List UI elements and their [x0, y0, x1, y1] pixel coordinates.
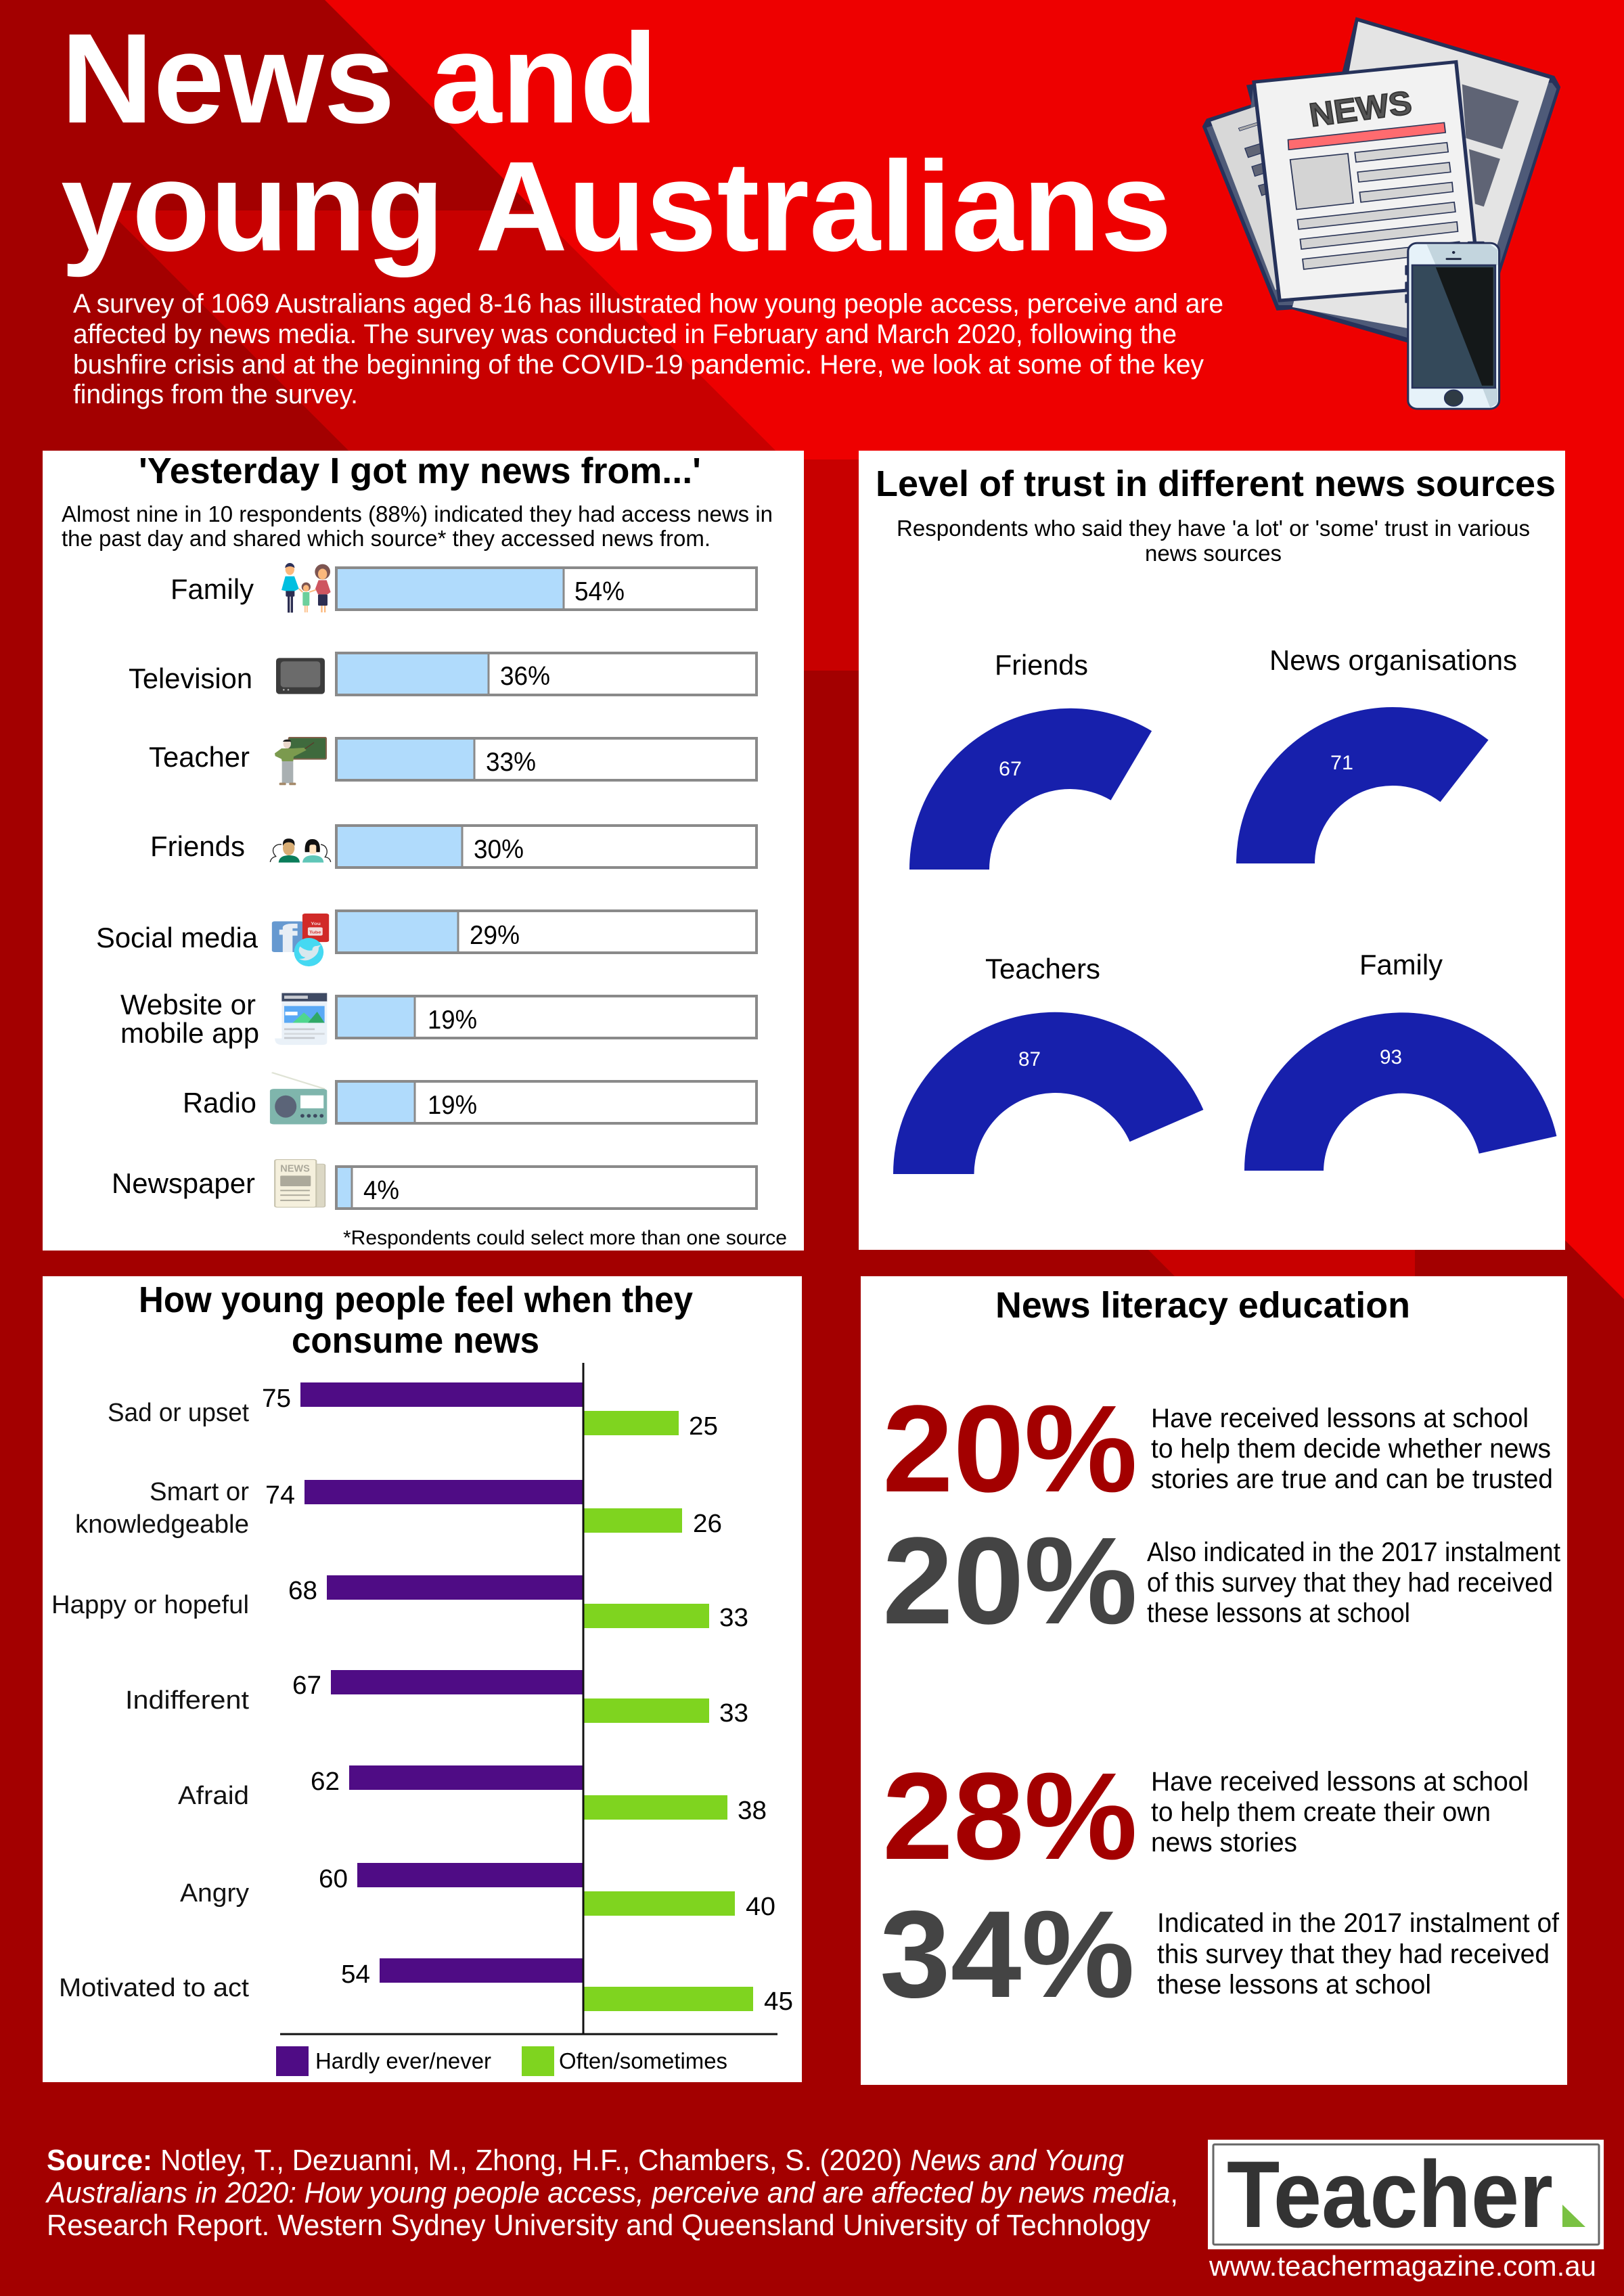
gauge: friends 67: Friends: [995, 649, 1088, 681]
diverging bar chart: 33: [719, 1699, 748, 1728]
diverging bar chart: 74: [265, 1481, 295, 1510]
gauge: news organisations 71: [1236, 644, 1517, 863]
diverging bar chart: 62: [311, 1768, 340, 1796]
intro text: [73, 289, 1223, 409]
stat: 34 percent in 2017: Indicated in the 2017 instalment of: [1157, 1908, 1560, 1938]
bar chart: news sources: Radio: [183, 1087, 256, 1119]
website url: www.teachermagazine.com.au: [1209, 2250, 1596, 2282]
icon: television: [276, 658, 325, 694]
bar chart: news sources: 4%: [363, 1176, 399, 1205]
stat: 20 percent in 2017: [882, 1511, 1560, 1650]
stat: 28 percent create news: Have received lessons at school: [1151, 1767, 1529, 1797]
stat: 28 percent create news: [882, 1747, 1529, 1885]
icon: newspapers and phone: NEWS: [1307, 85, 1414, 134]
source citation: News and Young: [910, 2144, 1125, 2177]
bar chart: news sources: 19%: [428, 1006, 477, 1035]
heading: yesterday: 'Yesterday I got my news from...': [139, 451, 701, 491]
diverging bar chart: 38: [738, 1797, 767, 1825]
source citation: Australians in 2020: How young people access, perceive and are affected by news media,: [45, 2176, 1178, 2209]
legend: [276, 2046, 727, 2076]
bar chart: news sources: Friends: [150, 830, 245, 862]
bar chart: news sources: mobile app: [120, 1017, 259, 1049]
text: access summary: [62, 502, 773, 552]
stat: 34 percent in 2017: this survey that they had received: [1157, 1939, 1550, 1969]
gauge: family 93: [1244, 949, 1556, 1171]
gauge: friends 67: 67: [999, 758, 1022, 780]
panel: yesterday I got my news from: [43, 451, 804, 1251]
bar chart: news sources: 19%: [428, 1091, 477, 1120]
intro text: bushfire crisis and at the beginning of the COVID-19 pandemic. Here, we look at some of the key: [73, 350, 1204, 380]
heading: literacy: News literacy education: [995, 1285, 1410, 1326]
logo: Teacher: Teacher: [1227, 2141, 1553, 2247]
bar chart: news sources: 29%: [470, 921, 520, 950]
text: trust subtitle: [897, 516, 1530, 566]
title: News and: [61, 7, 658, 150]
stat: 20 percent in 2017: Also indicated in the 2017 instalment: [1147, 1537, 1560, 1567]
stat: 28 percent create news: to help them create their own: [1151, 1797, 1491, 1827]
title: [61, 7, 1172, 278]
stat: 20 percent in 2017: 20%: [882, 1511, 1137, 1650]
gauge: news organisations 71: News organisations: [1269, 644, 1517, 676]
diverging bar chart: Happy or hopeful: [51, 1591, 249, 1619]
stat: 34 percent in 2017: [880, 1885, 1560, 2023]
bar chart: news sources: Social media: [96, 922, 258, 953]
gauge: teachers 87: [893, 953, 1203, 1174]
legend: Hardly ever/never: [315, 2049, 491, 2074]
icon: social media: You: [311, 922, 321, 926]
icon: newspaper: NEWS: [280, 1163, 310, 1174]
icon: teacher: [275, 738, 326, 785]
stat: 28 percent create news: 28%: [882, 1747, 1137, 1885]
icon: newspapers and phone: [1202, 17, 1560, 409]
diverging bar chart: 45: [764, 1987, 793, 2016]
source citation: Source:: [47, 2144, 152, 2177]
gauge: teachers 87: 87: [1018, 1048, 1041, 1071]
text: access summary: the past day and shared which source* they accessed news from.: [62, 526, 710, 552]
diverging bar chart: Smart or: [150, 1478, 249, 1506]
icon: radio: [270, 1073, 327, 1125]
diverging bar chart: 68: [288, 1577, 317, 1605]
bar chart: news sources: 30%: [474, 835, 524, 864]
source citation: Research Report. Western Sydney University and Queensland University of Technology: [47, 2209, 1150, 2242]
heading: trust: Level of trust in different news sources: [876, 464, 1556, 504]
gauge: teachers 87: Teachers: [985, 953, 1100, 985]
stat: 20 percent in 2017: these lessons at school: [1147, 1598, 1410, 1628]
diverging bar chart: 26: [693, 1510, 722, 1538]
icon: social media: [272, 914, 329, 966]
diverging bar chart: Angry: [180, 1879, 249, 1908]
icon: website: [275, 993, 327, 1045]
bar chart: news sources: Television: [129, 662, 252, 694]
diverging bar chart: 60: [319, 1865, 348, 1893]
bar chart: news sources: [96, 568, 757, 1209]
source citation: Notley, T., Dezuanni, M., Zhong, H.F., Chambers, S. (2020): [160, 2144, 902, 2177]
diverging bar chart: 75: [262, 1385, 291, 1413]
gauge: friends 67: [909, 649, 1152, 870]
panel: news literacy education: [861, 1276, 1567, 2085]
footnote: *Respondents could select more than one source: [343, 1227, 787, 1249]
title: young Australians: [61, 135, 1172, 278]
bar chart: news sources: Teacher: [149, 741, 250, 773]
bar chart: news sources: Family: [171, 573, 254, 605]
diverging bar chart: 67: [292, 1671, 321, 1700]
diverging bar chart: knowledgeable: [75, 1510, 249, 1539]
heading: feelings: How young people feel when they: [139, 1280, 693, 1320]
diverging bar chart: 54: [341, 1960, 370, 1989]
bar chart: news sources: 33%: [486, 748, 536, 777]
diverging bar chart: [51, 1363, 793, 2034]
stat: 20 percent in 2017: of this survey that they had received: [1147, 1568, 1553, 1598]
stat: 20 percent lessons on trust: Have received lessons at school: [1151, 1403, 1529, 1433]
diverging bar chart: 33: [719, 1604, 748, 1632]
source citation: [45, 2144, 1178, 2242]
diverging bar chart: Indifferent: [125, 1686, 249, 1715]
gauge: news organisations 71: 71: [1330, 752, 1353, 774]
panel: how young people feel: [43, 1276, 802, 2082]
bar chart: news sources: Website or: [120, 989, 256, 1020]
icon: family: [281, 563, 331, 612]
stat: 20 percent lessons on trust: stories are true and can be trusted: [1151, 1464, 1553, 1494]
icon: social media: Tube: [309, 930, 321, 935]
bar chart: news sources: 54%: [574, 577, 625, 606]
stat: 34 percent in 2017: these lessons at school: [1157, 1970, 1431, 2000]
diverging bar chart: 25: [689, 1412, 718, 1441]
diverging bar chart: Motivated to act: [59, 1974, 249, 2002]
diverging bar chart: Sad or upset: [108, 1399, 249, 1427]
heading: feelings: [139, 1280, 693, 1361]
intro text: affected by news media. The survey was conducted in February and March 2020, following the: [73, 319, 1177, 349]
icon: friends: [270, 838, 331, 863]
gauge: family 93: Family: [1359, 949, 1443, 981]
diverging bar chart: Afraid: [178, 1782, 249, 1810]
text: trust subtitle: news sources: [1145, 541, 1282, 566]
text: trust subtitle: Respondents who said they have 'a lot' or 'some' trust in various: [897, 516, 1530, 541]
intro text: findings from the survey.: [73, 380, 358, 409]
heading: feelings: consume news: [292, 1320, 539, 1361]
text: access summary: Almost nine in 10 respondents (88%) indicated they had access news in: [62, 502, 773, 527]
bar chart: news sources: Newspaper: [112, 1167, 255, 1199]
stat: 20 percent lessons on trust: to help them decide whether news: [1151, 1434, 1551, 1464]
bar chart: news sources: 36%: [500, 662, 550, 691]
intro text: A survey of 1069 Australians aged 8-16 has illustrated how young people access, perceive and are: [73, 289, 1223, 319]
icon: newspaper: [275, 1160, 325, 1207]
stat: 20 percent lessons on trust: 20%: [882, 1379, 1137, 1518]
legend: Often/sometimes: [559, 2049, 727, 2074]
stat: 20 percent lessons on trust: [882, 1379, 1553, 1518]
gauge: family 93: 93: [1380, 1046, 1402, 1068]
diverging bar chart: 40: [746, 1893, 775, 1921]
stat: 34 percent in 2017: 34%: [880, 1885, 1135, 2023]
stat: 28 percent create news: news stories: [1151, 1828, 1297, 1858]
panel: level of trust: [859, 451, 1565, 1250]
